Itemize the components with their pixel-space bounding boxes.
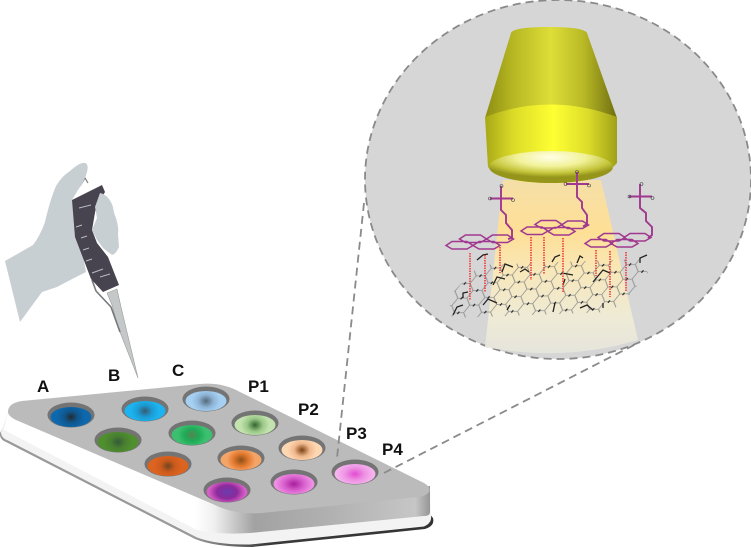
pipette tip (107, 289, 138, 378)
tray top face (8, 384, 429, 513)
red interaction lines (470, 237, 626, 300)
well B3 (218, 446, 264, 470)
well labels: A (37, 377, 49, 396)
well labels (37, 361, 403, 459)
well labels: C (172, 361, 184, 380)
well labels: P4 (382, 440, 403, 459)
graphene sheet (448, 254, 648, 318)
molecule: left pyrene sulfonate (446, 184, 514, 249)
glove (5, 163, 88, 322)
gloved hand with pipette (5, 163, 138, 378)
well C2 (232, 410, 278, 436)
well B1 (122, 396, 168, 422)
well C3 (278, 436, 326, 460)
light beam (485, 180, 638, 353)
yellow lamp (485, 27, 617, 183)
well C4 (332, 460, 378, 484)
dashed connector lines (337, 203, 640, 473)
well A1 (48, 402, 94, 428)
tray side (4, 412, 430, 534)
well B4 (270, 470, 318, 494)
molecule: right pyrene sulfonate (585, 182, 654, 247)
well B2 (168, 420, 216, 446)
well labels: P2 (298, 400, 319, 419)
well A3 (144, 452, 192, 476)
well C1 (182, 386, 230, 412)
wells (48, 386, 378, 502)
magnified view circle (365, 0, 751, 359)
sample tray (0, 384, 433, 547)
well labels: B (108, 366, 120, 385)
pipette body (72, 185, 119, 292)
well labels: P3 (346, 424, 367, 443)
well A4 (204, 478, 250, 502)
well A2 (94, 428, 142, 452)
tray rim (0, 418, 433, 547)
molecule: middle pyrene sulfonate (521, 170, 590, 235)
tray white lip (1, 412, 431, 545)
fingers (92, 193, 119, 255)
well labels: P1 (248, 377, 269, 396)
